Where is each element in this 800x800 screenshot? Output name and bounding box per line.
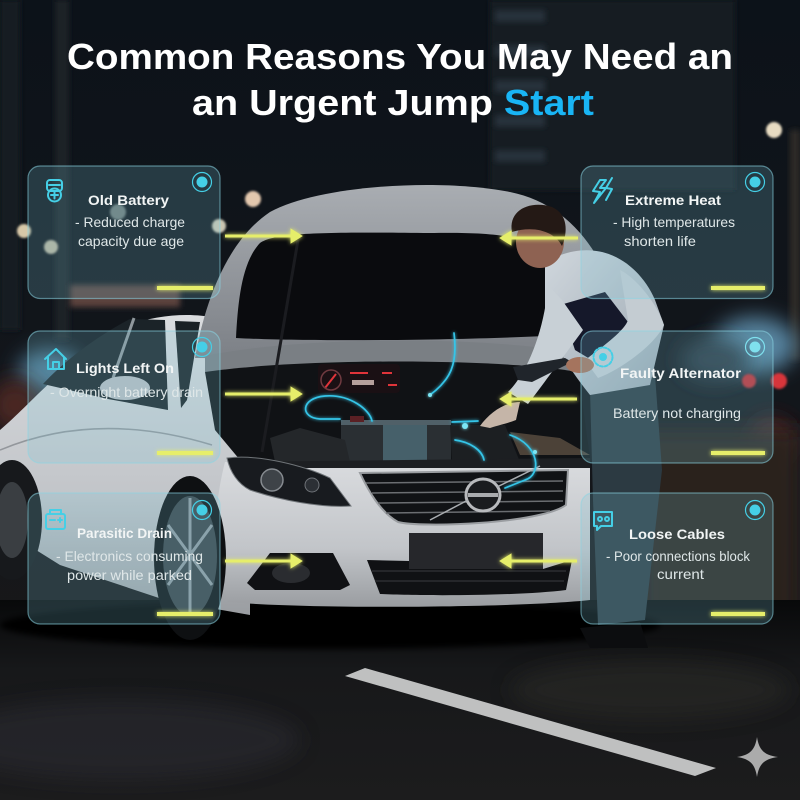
panel: Extreme Heat: Extreme Heat bbox=[625, 192, 721, 208]
panel: Parasitic Drain: power while parked bbox=[67, 567, 192, 583]
panel: Parasitic Drain bbox=[28, 493, 220, 624]
panel: Loose Cables bbox=[581, 493, 773, 624]
front wheel bbox=[154, 476, 226, 640]
head bbox=[516, 216, 564, 268]
arrow: Parasitic Drain bbox=[225, 556, 300, 566]
shirt and torso bbox=[545, 250, 664, 395]
panel: Old Battery: capacity due age bbox=[78, 233, 184, 249]
icon: lightning bolts bbox=[593, 178, 612, 203]
arrow: Faulty Alternator bbox=[502, 394, 577, 404]
lower intake bbox=[367, 560, 572, 595]
wet road with lane marking bbox=[0, 600, 800, 800]
engine bay bbox=[205, 362, 590, 460]
dashboard red display bbox=[318, 364, 400, 393]
panel: Extreme Heat: - High temperatures bbox=[613, 214, 735, 230]
panel: Faulty Alternator: Faulty Alternator bbox=[620, 365, 742, 381]
arrow: Old Battery bbox=[225, 231, 300, 241]
pillar and mirror bbox=[113, 318, 134, 378]
panel: Faulty Alternator: Battery not charging bbox=[613, 405, 741, 421]
panel: Lights Left On bbox=[28, 331, 220, 463]
grille bbox=[360, 470, 568, 525]
arrows from panels to car bbox=[225, 231, 578, 566]
title: an Urgent Jump Start bbox=[192, 82, 594, 123]
car battery bbox=[341, 416, 451, 462]
panel: Loose Cables: Loose Cables bbox=[629, 526, 725, 542]
arrow: Extreme Heat bbox=[502, 233, 578, 243]
tablet bbox=[513, 358, 572, 382]
icon: gear bbox=[594, 348, 612, 366]
open hood bbox=[195, 185, 600, 360]
engine parts bbox=[270, 428, 350, 462]
rear wheel bbox=[0, 460, 42, 580]
hood interior bbox=[236, 233, 545, 340]
arrow: Lights Left On bbox=[225, 389, 300, 399]
licence plate bbox=[409, 533, 543, 569]
icon: parasitic battery bbox=[46, 510, 65, 529]
panel: Loose Cables: - Poor connections block bbox=[606, 548, 751, 564]
icon: cables box bbox=[594, 512, 612, 530]
front bumper bbox=[216, 460, 590, 607]
panel: Old Battery: Old Battery bbox=[88, 192, 169, 208]
illustration: white car with open hood bbox=[0, 185, 660, 649]
hands bbox=[566, 357, 594, 373]
shoes bbox=[580, 622, 648, 648]
panel: Faulty Alternator bbox=[581, 331, 773, 463]
headlight bbox=[227, 457, 351, 506]
upper arm bbox=[585, 270, 664, 378]
panel: Loose Cables: current bbox=[657, 566, 704, 582]
portfolio under arm bbox=[560, 292, 628, 365]
wire diagnostics bbox=[306, 333, 537, 488]
illustration: mechanic with clipboard bbox=[480, 205, 664, 648]
arrow: Loose Cables bbox=[502, 556, 577, 566]
side windows bbox=[43, 319, 168, 410]
panel: Old Battery: - Reduced charge bbox=[75, 214, 185, 230]
trousers bbox=[590, 375, 662, 625]
panel: Lights Left On: - Overnight battery drain bbox=[50, 384, 203, 400]
car side body bbox=[0, 315, 250, 615]
car shadow bbox=[0, 601, 660, 649]
icon: battery bbox=[47, 180, 62, 202]
panel: Old Battery bbox=[28, 166, 220, 298]
icon: sparkle watermark bbox=[737, 737, 778, 777]
panel: Parasitic Drain: Parasitic Drain bbox=[77, 525, 172, 541]
title bbox=[67, 36, 733, 123]
fog lamp bbox=[247, 553, 350, 590]
panel: Lights Left On: Lights Left On bbox=[76, 360, 174, 376]
forearm to battery bbox=[508, 285, 583, 404]
panel: Extreme Heat: shorten life bbox=[624, 233, 696, 249]
title: Common Reasons You May Need an bbox=[67, 36, 733, 77]
grille emblem bbox=[430, 466, 540, 520]
icon: house bbox=[45, 349, 66, 369]
panel: Parasitic Drain: - Electronics consuming bbox=[56, 548, 203, 564]
upper lip bbox=[228, 458, 590, 468]
panel: Extreme Heat bbox=[581, 166, 773, 298]
hood strut bbox=[262, 240, 298, 452]
